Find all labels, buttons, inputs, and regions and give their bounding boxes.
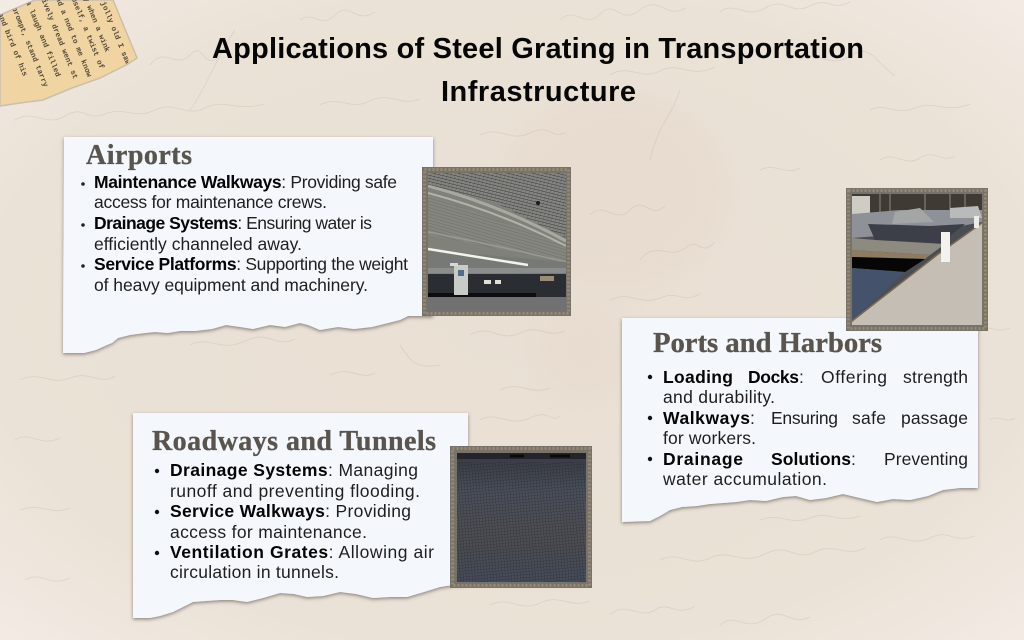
list: ports and harbors: Ensuring [771, 408, 838, 428]
title: Infrastructure [441, 76, 636, 108]
title: Applications of Steel Grating in Transportation [212, 33, 864, 65]
torn paper: airports [63, 137, 433, 353]
list: airports [81, 172, 408, 295]
sticker: torn typewritten paper: a laugh and filled [23, 0, 61, 78]
list: ports and harbors: safe [852, 408, 886, 428]
list: ports and harbors: and durability. [663, 387, 775, 407]
list: roadways and tunnels: Drainage Systems: Managing [170, 460, 418, 480]
photo: road surface grating [450, 446, 592, 588]
list: airports: Maintenance Walkways: Providing safe [94, 172, 397, 192]
list: airports: efficiently channeled away. [94, 234, 302, 254]
list: roadways and tunnels: Ventilation Grates: Allowing air [170, 542, 434, 562]
list: ports and harbors: : [799, 367, 804, 387]
list: ports and harbors: : [851, 449, 856, 469]
list: roadways and tunnels: access for maintenance. [170, 522, 367, 542]
heading: airports: Airports [86, 140, 192, 171]
list: ports and harbors: Drainage [663, 449, 743, 469]
list: ports and harbors: Walkways [663, 408, 750, 428]
list: ports and harbors: passage [901, 408, 968, 428]
heading: roadways and tunnels: Roadways and Tunnels [152, 426, 436, 457]
list: ports and harbors: water accumulation. [662, 469, 827, 489]
list: airports: Drainage Systems: Ensuring water is [94, 213, 372, 233]
list: airports: Service Platforms: Supporting the weight [94, 254, 408, 274]
photo: marina dock [846, 188, 988, 331]
sticker: torn typewritten paper: prompt, stand tarry [9, 6, 49, 89]
list: ports and harbors: Loading [663, 367, 733, 387]
list: roadways and tunnels: Service Walkways: Providing [170, 501, 411, 521]
list: ports and harbors: Preventing [884, 449, 968, 469]
torn paper: ports [622, 318, 978, 522]
title [212, 33, 864, 108]
panel: roadways and tunnels [133, 413, 592, 618]
list: airports: access for maintenance crews. [94, 192, 327, 212]
list: ports and harbors: : [750, 408, 755, 428]
list: ports and harbors: Solutions [771, 449, 851, 469]
list: ports and harbors: Docks [748, 367, 799, 387]
sticker: torn typewritten paper [0, 0, 138, 107]
torn paper: roadways [133, 413, 468, 618]
photo: airport ceiling grating [422, 167, 571, 316]
heading: ports and harbors: Ports and Harbors [653, 328, 882, 359]
list: roadways and tunnels [155, 460, 434, 582]
list: roadways and tunnels: circulation in tunnels. [170, 562, 339, 582]
list: roadways and tunnels: runoff and preventing flooding. [170, 481, 420, 501]
panel: airports [63, 137, 571, 353]
list: airports: of heavy equipment and machinery. [94, 275, 368, 295]
list: ports and harbors: strength [903, 367, 968, 387]
panel: ports and harbors [622, 188, 988, 522]
list: ports and harbors: Offering [821, 367, 887, 387]
list: ports and harbors: for workers. [663, 428, 756, 448]
list: ports and harbors [648, 367, 968, 489]
